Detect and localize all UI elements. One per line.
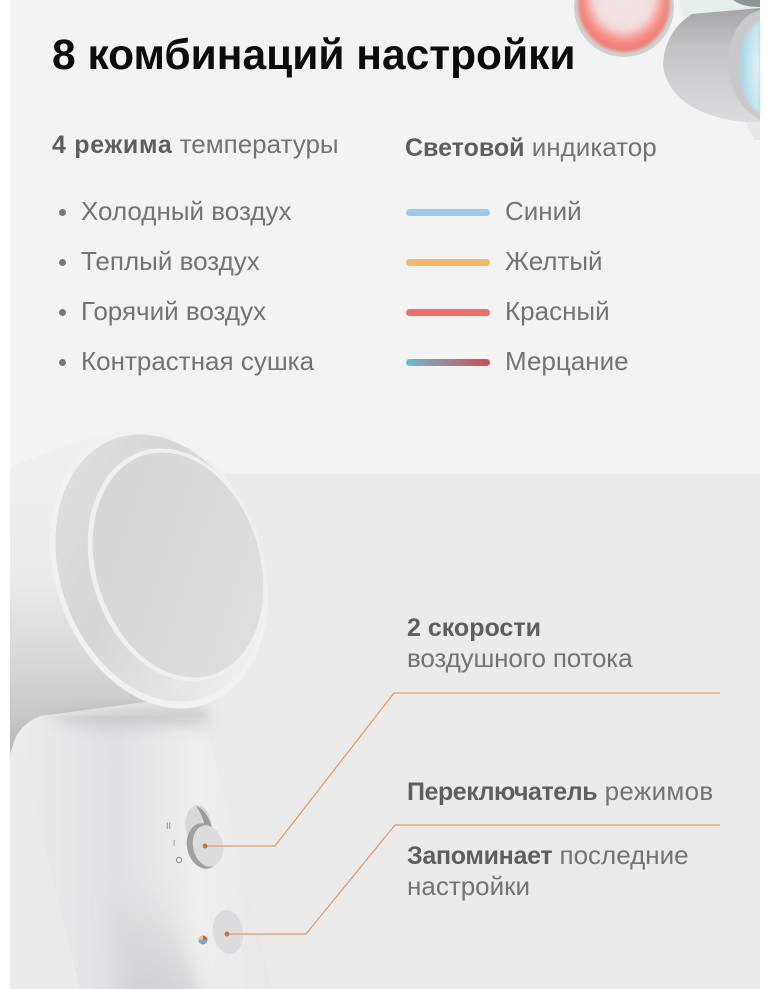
title: 8 комбинаций настройки [52,32,576,79]
list: temperature modes [59,196,314,376]
bullet item: contrast drying: Контрастная сушка [81,346,314,376]
colour indicator icon [198,936,208,944]
legend: flicker: Мерцание [505,346,629,376]
callout text: airflow speeds: 2 скорости [407,614,541,642]
legend: blue [406,196,582,226]
legend: yellow: Желтый [505,246,603,276]
bullet item: hot air: Горячий воздух [81,296,266,326]
head ring [14,400,304,738]
icon: hair dryer [10,400,304,989]
memory button [210,908,246,956]
heading: light indicator: Световой индикатор [405,132,657,162]
bullet item: cold air: Холодный воздух [81,196,291,226]
icon: red indicator dryer [574,0,760,57]
callout text: memory: настройки [407,871,530,901]
callout text: airflow speeds: воздушного потока [407,643,632,673]
icon: blue indicator dryer [663,8,760,140]
panel: upper background [10,0,760,474]
mode switch: I [173,839,175,848]
legend: red: Красный [505,296,610,326]
handle shadow [45,708,212,733]
bullet item: warm air: Теплый воздух [81,246,260,276]
legend: flicker [406,346,629,376]
panel: lower background [10,474,760,989]
callout text: memory [407,840,689,901]
callout text: airflow speeds [407,614,633,673]
callout text: memory: Запоминает последние [407,840,689,870]
callout line: switch to airflow [202,693,720,848]
handle [13,716,272,989]
head face [66,431,290,699]
mode switch [166,805,227,872]
callout text: mode switch: Переключатель режимов [407,776,713,806]
mode switch: II [166,821,171,831]
legend: blue: Синий [505,196,582,226]
handle lower shading [110,880,205,989]
legend: red [406,296,610,326]
legend: yellow [406,246,603,276]
callout line: button to memory [224,825,720,936]
head face rim [60,426,294,704]
head barrel [10,432,160,755]
heading: temperature modes: 4 режима температуры [52,129,339,159]
